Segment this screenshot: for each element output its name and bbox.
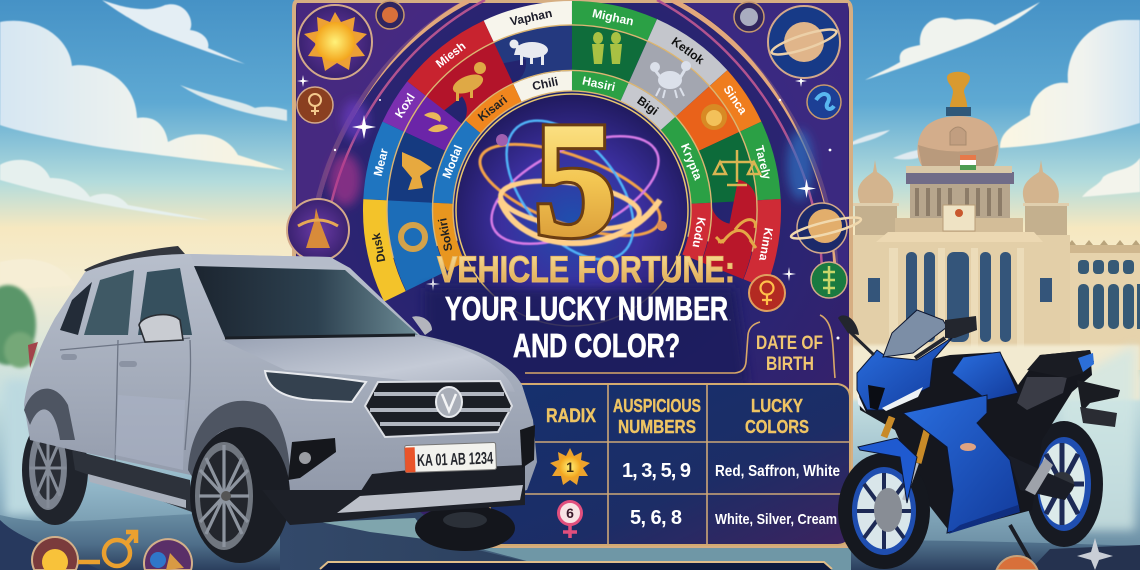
swing arm [1008, 455, 1075, 500]
title panel [425, 249, 748, 384]
outer band sectors [294, 0, 850, 488]
forks [884, 417, 927, 463]
row 2 colors: White, Silver, Cream [715, 511, 837, 528]
motorcycle: blue sport bike [838, 310, 1120, 569]
sector labels: Kinna [756, 227, 776, 262]
grille [365, 381, 512, 437]
icon: gemini [592, 32, 622, 64]
windshield [194, 266, 418, 338]
side dome left [858, 160, 893, 203]
mist [5, 345, 1135, 530]
clouds left [0, 0, 287, 290]
icon: green medallion [811, 262, 847, 298]
bottom left icon: mars [78, 532, 136, 566]
date of birth tag: BIRTH [766, 354, 814, 375]
right wing [1068, 245, 1140, 370]
icon: fish [424, 112, 448, 132]
windshield [883, 310, 947, 357]
sector labels: Ketlok [669, 34, 707, 67]
icon: ram [450, 62, 486, 101]
centre disc [456, 94, 688, 326]
sill [72, 450, 192, 512]
steps [852, 345, 1140, 400]
headlight [882, 387, 923, 411]
car: silver SUV [22, 246, 537, 563]
inner band sectors [390, 28, 754, 392]
centre panel [294, 0, 851, 546]
icon: sun medallion [298, 5, 372, 79]
arch [308, 0, 836, 290]
sector labels: Bigi [635, 93, 661, 118]
row 1 numbers: 1, 3, 5, 9 [622, 460, 691, 482]
tree right [1092, 315, 1140, 385]
road foreground under car and panel [280, 512, 851, 570]
icon: sparkle [1077, 538, 1113, 570]
rear wheel [22, 415, 88, 525]
header: lucky colors: LUCKY [751, 396, 803, 416]
table: radix numbers and colors [490, 384, 850, 545]
attic band [895, 218, 1023, 232]
mirrors [838, 315, 977, 358]
icon: crown medallion [287, 199, 349, 261]
number plate: KA 01 AB 1234 [417, 448, 494, 470]
main dome [917, 116, 999, 166]
sector labels: Mighan [591, 6, 635, 29]
icon: scorpion [716, 220, 756, 248]
drum [910, 180, 1010, 218]
door lines [60, 338, 191, 470]
header: radix: RADIX [546, 406, 596, 427]
number 5: 5 [534, 91, 616, 270]
icon: blue swirl [807, 85, 841, 119]
icon: saturn medallion [768, 6, 840, 78]
building: Vidhana Soudha [852, 72, 1140, 385]
portico [876, 232, 1043, 242]
front side window [138, 268, 192, 335]
date of birth tag [525, 315, 835, 378]
tank [952, 352, 1018, 400]
clouds right [852, 2, 1140, 197]
sector labels: Hasiri [581, 74, 617, 94]
front fender [858, 438, 917, 503]
sector labels: Sinca [721, 83, 750, 117]
sector labels: Modal [439, 143, 465, 180]
side dome right [1023, 160, 1059, 203]
front arch [188, 401, 290, 490]
middle side window [84, 270, 134, 335]
door handles [61, 354, 137, 367]
roof rail [84, 246, 192, 276]
far mirror [412, 316, 432, 335]
rear arch [24, 389, 75, 440]
hood [222, 337, 515, 392]
sector labels: Dusk [369, 232, 388, 263]
body underlay [858, 350, 1092, 532]
front wheel [190, 427, 290, 563]
header: auspicious numbers: NUMBERS [618, 417, 696, 437]
nebula [329, 100, 813, 206]
icon: orange planet bottom [996, 556, 1038, 570]
zodiac wheel [294, 0, 850, 488]
main fairing [903, 395, 1020, 533]
number plate [405, 442, 496, 473]
stand [1010, 525, 1030, 560]
roof highlight [190, 254, 345, 266]
sector labels: Sokiri [435, 217, 455, 252]
icon: venus medallion [297, 87, 333, 123]
title line 3: AND COLOR? [513, 327, 680, 364]
row 2 radix: venus 6 [558, 502, 582, 538]
number 5: 5 [534, 91, 616, 270]
icon: crab [650, 61, 691, 98]
sector labels: Miesh [433, 39, 468, 71]
tree left [0, 285, 36, 368]
emblem [947, 72, 970, 110]
symbol band sectors [343, 0, 801, 439]
bottom left icon: sun [32, 537, 78, 570]
row 2 radix: venus 6: 6 [566, 505, 574, 521]
sector labels [369, 6, 776, 263]
icon: pisces ring [401, 225, 425, 249]
mirror [139, 315, 183, 342]
foot peg bracket [1025, 458, 1053, 495]
sector labels: Kodu [689, 216, 709, 249]
icon: red venus [749, 275, 785, 311]
rear wheel [1025, 421, 1103, 547]
icon: libra [714, 150, 760, 185]
body [24, 254, 537, 520]
icon: lion [701, 104, 727, 130]
door shading [115, 395, 185, 470]
seat [1017, 377, 1067, 410]
right side lamp [520, 425, 535, 468]
sector labels: Mear [371, 147, 391, 178]
road [0, 512, 1140, 570]
main block [852, 235, 1070, 385]
side badge [960, 443, 976, 451]
purple corners [297, 3, 460, 285]
row 1 radix: sun 1: 1 [566, 459, 574, 475]
crest [943, 205, 975, 231]
headlight [265, 371, 366, 402]
sector labels: Tarely [752, 144, 774, 181]
sector labels: Chili [531, 74, 559, 93]
front wheel [838, 453, 930, 569]
date of birth tag: DATE OF [756, 333, 823, 354]
fog lamp [288, 438, 336, 480]
header: auspicious numbers [613, 396, 701, 437]
header: lucky colors: COLORS [745, 417, 809, 437]
icon: grey planet [734, 2, 764, 32]
tail light [28, 342, 38, 368]
icon: capricorn [402, 152, 432, 190]
bottom left icon: figure medallion [144, 539, 192, 570]
sector labels: Krypta [678, 141, 705, 182]
upper fairing [857, 337, 953, 410]
row 1 colors: Red, Saffron, White [715, 463, 840, 480]
icon: orange planet [376, 1, 404, 29]
stars [297, 49, 840, 340]
sector labels: Vaphan [509, 6, 553, 29]
flag [960, 155, 976, 170]
tail tidy and plate [1077, 380, 1120, 427]
far wheel [415, 505, 515, 551]
sector labels: Koxl [392, 91, 418, 120]
row 2 numbers: 5, 6, 8 [630, 507, 682, 529]
icon: bull [510, 40, 548, 65]
ring lines [345, 0, 799, 437]
sector labels: Kisari [475, 93, 510, 124]
rear hump [1027, 350, 1094, 378]
title line 2: YOUR LUCKY NUMBER [445, 290, 728, 327]
lower grille [355, 465, 525, 500]
bumper skirt [262, 488, 525, 525]
rear side window [60, 282, 92, 335]
header: auspicious numbers: AUSPICIOUS [613, 396, 701, 416]
header: lucky colors [745, 396, 809, 437]
row 1 radix: sun 1 [550, 448, 590, 485]
title line 1: VEHICLE FORTUNE: [437, 249, 735, 290]
wiper line [225, 335, 415, 338]
bottom bar [320, 562, 832, 570]
icon: lower saturn [790, 203, 862, 253]
